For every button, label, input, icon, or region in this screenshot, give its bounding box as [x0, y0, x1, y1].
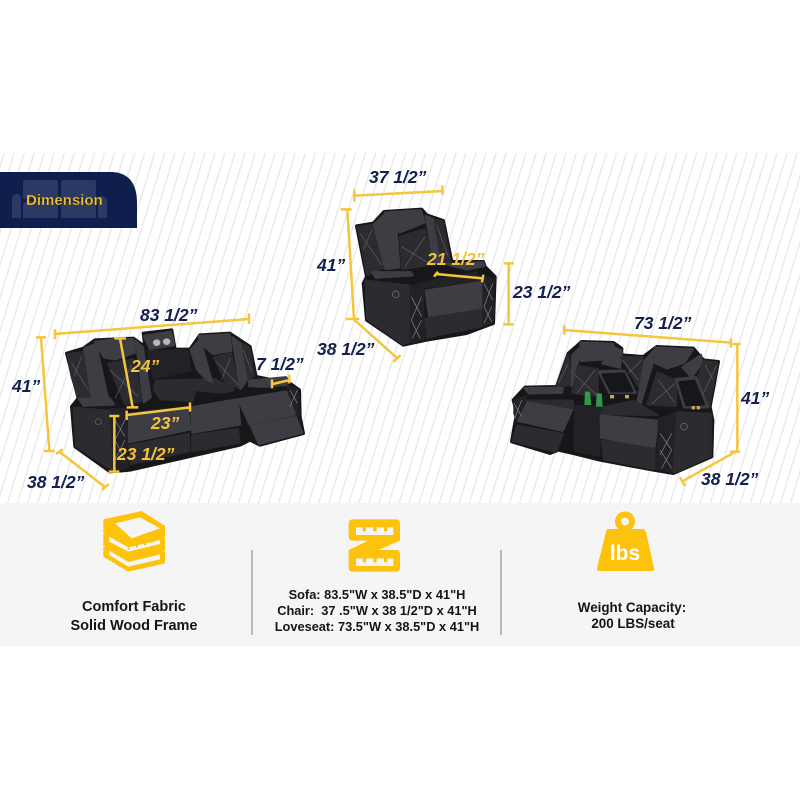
chair seat height label: 23 1/2”: [512, 282, 571, 302]
sofa illustration: [67, 330, 303, 472]
sofa back height label: 24”: [130, 356, 159, 376]
sofa seat height label: 23 1/2”: [116, 444, 175, 464]
text: weight capacity: 200 LBS/seat: [591, 616, 675, 631]
icon: fabric layers: [102, 511, 167, 572]
sofa dimension lines: [36, 313, 290, 490]
icon: tape measure: [349, 519, 400, 572]
text: weight capacity: Weight Capacity:: [578, 600, 686, 615]
text: product sizes: [275, 587, 479, 634]
loveseat width label: 73 1/2”: [634, 313, 692, 333]
sofa arm width label: 7 1/2”: [256, 354, 304, 374]
loveseat dimension lines: [564, 325, 741, 486]
text: weight capacity: [578, 600, 686, 631]
text: comfort fabric: Comfort Fabric: [82, 599, 186, 615]
chair depth label: 38 1/2”: [317, 339, 375, 359]
text: comfort fabric: [70, 599, 198, 634]
bottom feature panel: [0, 503, 800, 646]
loveseat illustration: [512, 342, 718, 473]
sofa seat width label: 23”: [150, 413, 179, 433]
text: product sizes: Sofa: 83.5"W x 38.5"D x 41"H: [289, 587, 465, 602]
icon: weight: lbs: [610, 542, 640, 565]
Dimension badge: Dimension: [26, 192, 103, 209]
chair arm-to-arm label: 21 1/2”: [426, 249, 485, 269]
Dimension badge: [0, 172, 137, 228]
sofa width label: 83 1/2”: [140, 305, 198, 325]
divider left: [251, 550, 253, 635]
sofa depth label: 38 1/2”: [27, 472, 85, 492]
icon: weight: [597, 514, 654, 571]
chair height label: 41”: [316, 255, 345, 275]
chair dimension lines: [341, 185, 514, 362]
text: product sizes: Chair: 37 .5"W x 38 1/2"D x 41"H: [277, 603, 477, 618]
text: comfort fabric: Solid Wood Frame: [70, 618, 198, 634]
striped background panel: [0, 153, 800, 503]
text: product sizes: Loveseat: 73.5"W x 38.5"D x 41"H: [275, 619, 479, 634]
loveseat depth label: 38 1/2”: [701, 469, 759, 489]
divider right: [500, 550, 502, 635]
chair illustration: [357, 209, 495, 345]
loveseat height label: 41”: [740, 388, 769, 408]
chair width label: 37 1/2”: [369, 167, 427, 187]
sofa height label: 41”: [11, 376, 40, 396]
